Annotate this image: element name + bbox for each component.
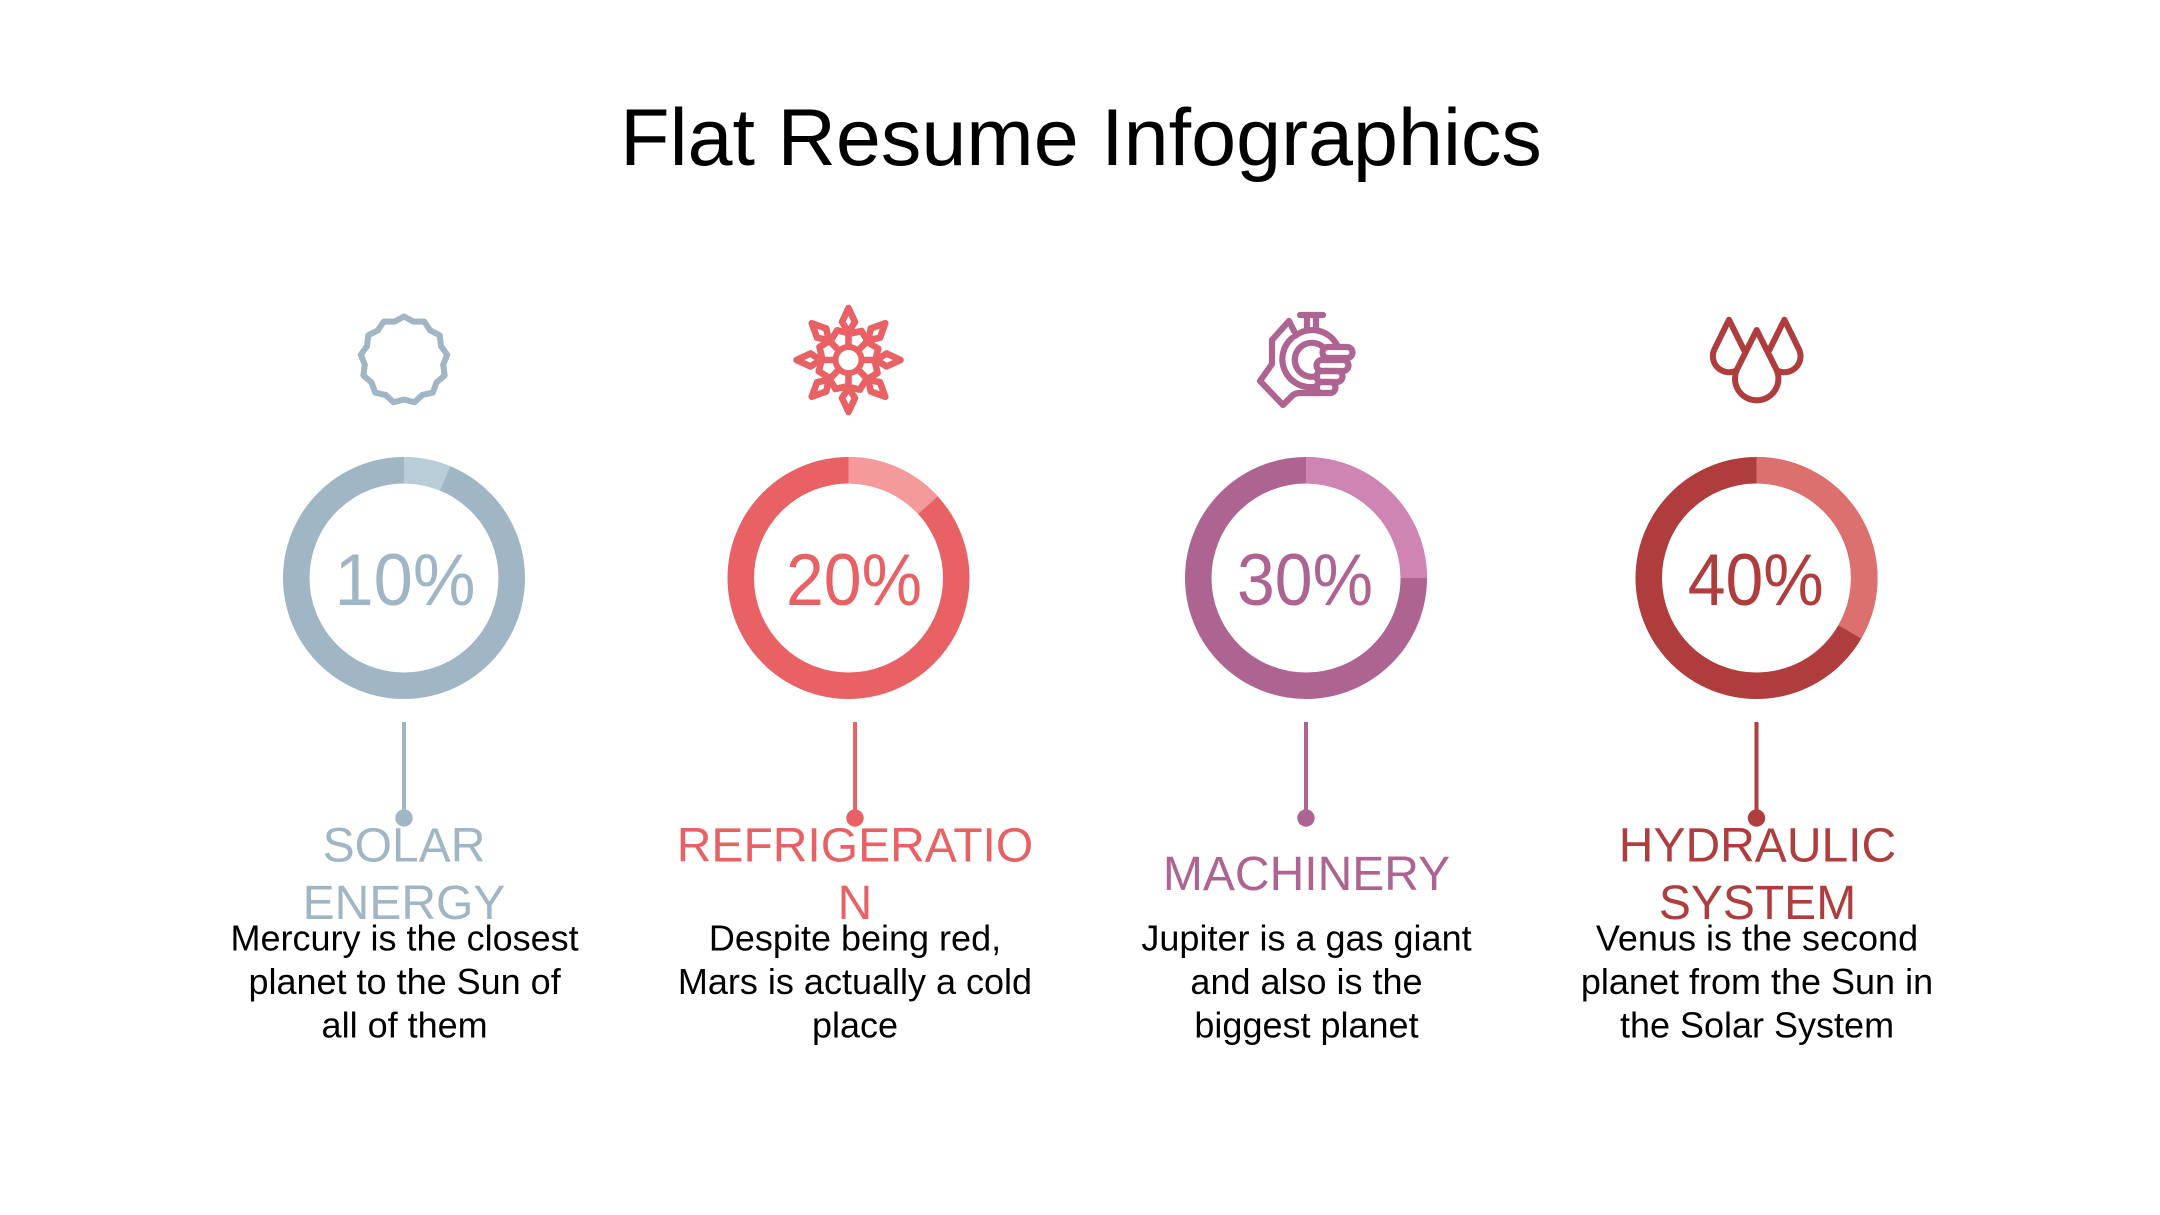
heading: refrigeration: N <box>838 877 872 930</box>
title: Flat Resume Infographics <box>620 93 1542 183</box>
connector line with dot <box>1748 722 1765 827</box>
connector line with dot <box>1297 722 1315 827</box>
description: venus: planet from the Sun in <box>1581 961 1933 1002</box>
heading: hydraulic system: SYSTEM <box>1659 877 1856 930</box>
panel: hydraulic system <box>1581 320 1933 1045</box>
percentage: 10%: 10% <box>334 540 476 621</box>
panel: solar energy <box>231 316 579 1045</box>
heading: solar energy: SOLAR <box>323 820 485 873</box>
heading: machinery: MACHINERY <box>1163 848 1450 901</box>
description: mercury: all of them <box>322 1004 488 1045</box>
donut chart: 20% <box>741 470 956 686</box>
description: jupiter: biggest planet <box>1194 1004 1419 1045</box>
description: mercury: planet to the Sun of <box>248 961 562 1002</box>
donut chart: 30% <box>1198 470 1414 686</box>
description: jupiter: Jupiter is a gas giant <box>1141 917 1472 958</box>
icon: water drops <box>1713 320 1801 400</box>
panel: refrigeration <box>677 308 1033 1045</box>
description: mars: Mars is actually a cold <box>678 961 1032 1002</box>
percentage: 30%: 30% <box>1237 540 1373 621</box>
icon: snowflake <box>796 308 900 412</box>
heading: hydraulic system: HYDRAULIC <box>1619 820 1896 873</box>
description: venus: Venus is the second <box>1596 917 1918 958</box>
heading: refrigeration: REFRIGERATIO <box>677 820 1033 873</box>
description: jupiter: and also is the <box>1190 961 1423 1002</box>
percentage: 20%: 20% <box>786 540 922 621</box>
icon: hand holding gauge <box>1260 315 1352 405</box>
description: mars: place <box>812 1004 898 1045</box>
donut chart: 40% <box>1649 470 1864 686</box>
icon: sun outline <box>360 316 448 404</box>
connector line with dot <box>846 722 864 827</box>
description: venus: the Solar System <box>1620 1004 1894 1045</box>
donut chart: 10% <box>296 470 512 686</box>
description: mars: Despite being red, <box>709 917 1001 958</box>
connector line with dot <box>395 722 413 827</box>
percentage: 40%: 40% <box>1688 540 1824 621</box>
panel: machinery <box>1141 315 1472 1045</box>
description: mercury: Mercury is the closest <box>231 917 579 958</box>
heading: solar energy: ENERGY <box>303 877 505 930</box>
